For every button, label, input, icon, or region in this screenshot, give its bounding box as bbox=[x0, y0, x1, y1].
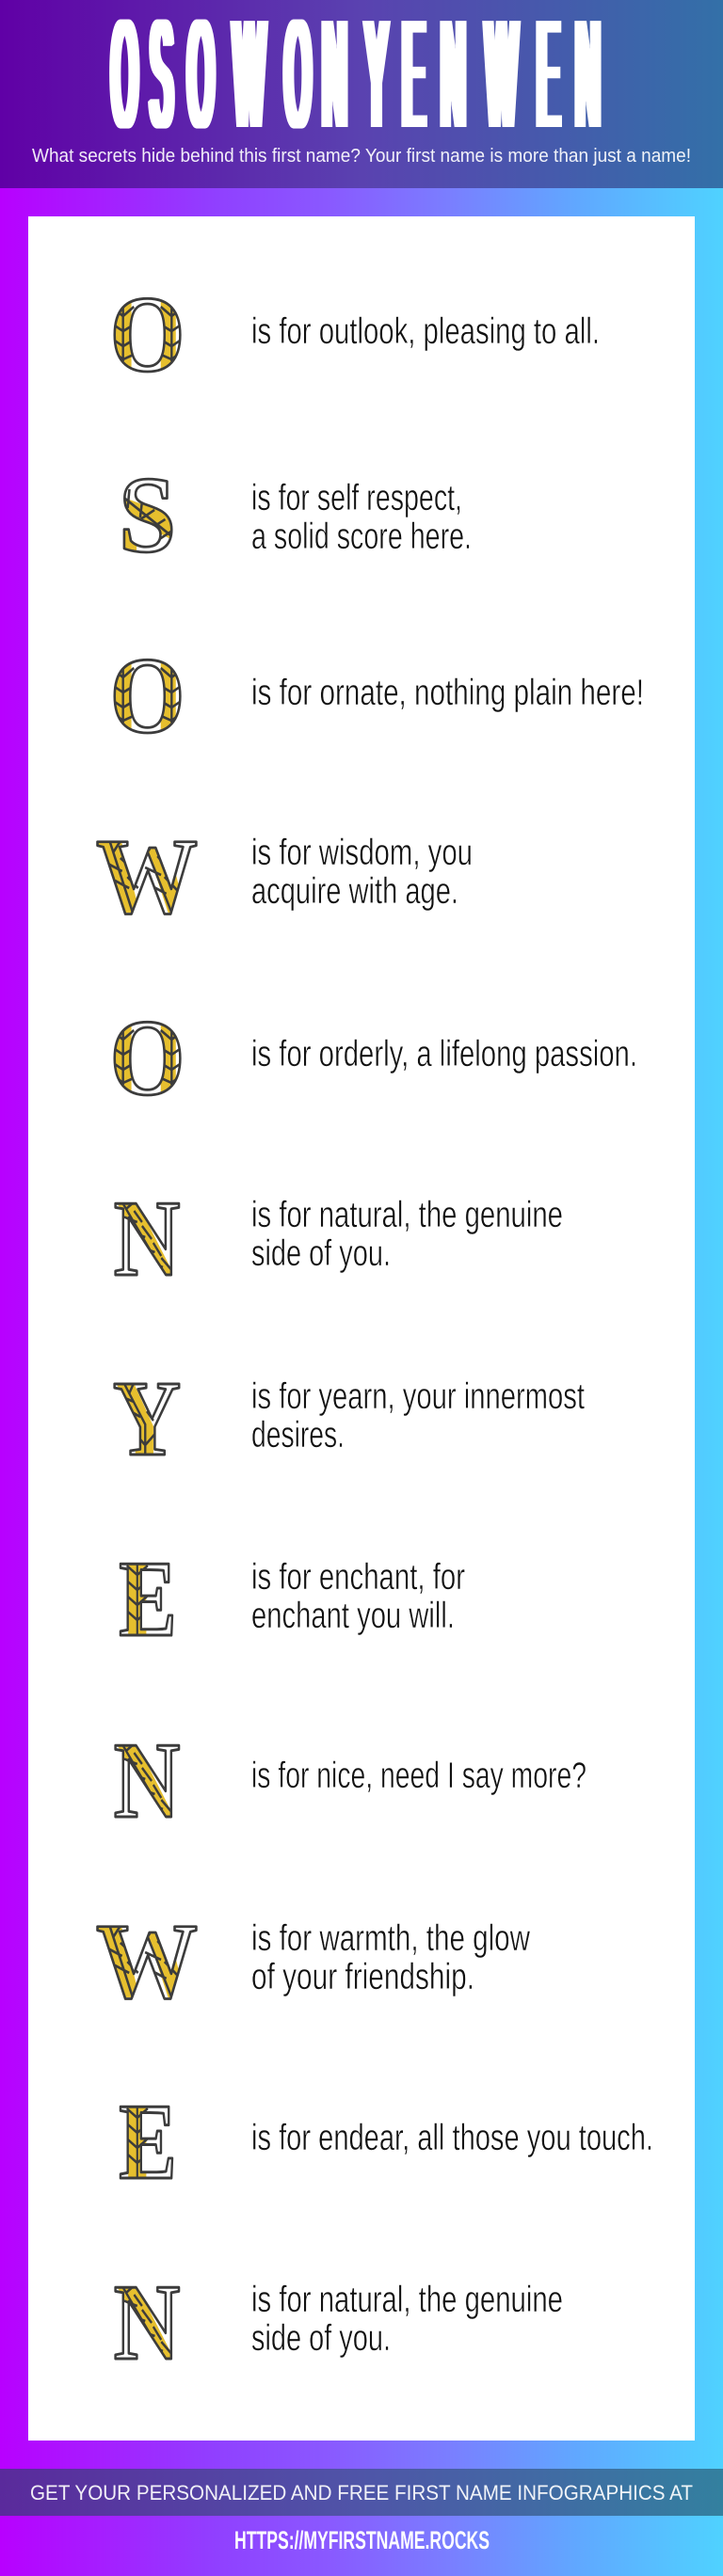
icon: letter N: N bbox=[114, 2264, 180, 2383]
icon: letter E: E bbox=[119, 2081, 177, 2202]
icon: letter N: N bbox=[114, 2264, 180, 2383]
text: W lines: of your friendship. bbox=[251, 1957, 474, 1997]
text: N lines bbox=[251, 2280, 563, 2359]
row 5: O bbox=[113, 1020, 635, 1097]
icon: letter N: N bbox=[114, 1722, 180, 1841]
row 12: N bbox=[114, 2284, 562, 2360]
icon: letter N: N bbox=[114, 1180, 180, 1299]
panel: letters list bbox=[28, 216, 695, 2441]
text: Y lines: desires. bbox=[251, 1415, 345, 1455]
text: W lines bbox=[251, 833, 473, 912]
text: Y lines bbox=[251, 1376, 585, 1455]
icon: letter E: E bbox=[119, 1538, 177, 1659]
icon: letter N: N bbox=[114, 1180, 180, 1299]
icon: letter O: O bbox=[110, 998, 185, 1118]
row 2: S bbox=[122, 478, 469, 553]
text: N lines: side of you. bbox=[251, 2318, 391, 2359]
icon: letter S: S bbox=[119, 455, 176, 576]
icon: letter N: N bbox=[114, 1722, 180, 1841]
icon: letter O bbox=[113, 297, 182, 373]
icon: letter N bbox=[114, 1744, 181, 1818]
icon: letter N bbox=[114, 1202, 181, 1276]
row 3: O bbox=[113, 659, 642, 734]
icon: letter W: W bbox=[96, 818, 198, 937]
text: S lines: a solid score here. bbox=[251, 517, 472, 557]
icon: letter S: S bbox=[119, 455, 176, 576]
header band bbox=[0, 0, 723, 188]
icon: letter O: O bbox=[110, 636, 185, 755]
icon: letter N bbox=[114, 2286, 181, 2360]
text: W lines: acquire with age. bbox=[251, 871, 458, 912]
row 6: N bbox=[114, 1201, 562, 1276]
icon: letter W bbox=[96, 840, 198, 915]
icon: letter W: W bbox=[96, 818, 198, 937]
row 8: E bbox=[119, 1562, 465, 1637]
text: O line: is for outlook, pleasing to all. bbox=[251, 311, 600, 352]
text: N lines: is for natural, the genuine bbox=[251, 2280, 563, 2320]
icon: letter Y: Y bbox=[113, 1360, 181, 1479]
icon: letter S bbox=[122, 478, 173, 553]
text: E lines bbox=[251, 1557, 465, 1636]
icon: letter O: O bbox=[110, 275, 185, 394]
text: Y lines: is for yearn, your innermost bbox=[251, 1376, 585, 1417]
icon: letter O: O bbox=[110, 998, 185, 1118]
text: W lines: is for wisdom, you bbox=[251, 833, 473, 873]
icon: letter O bbox=[113, 659, 182, 734]
row 11: E bbox=[119, 2106, 651, 2179]
icon: letter E bbox=[119, 1562, 173, 1637]
row 4: W bbox=[96, 837, 471, 915]
footer call to action: GET YOUR PERSONALIZED AND FREE FIRST NAME INFOGRAPHICS AT bbox=[30, 2481, 693, 2504]
row 10: W bbox=[96, 1923, 530, 2000]
footer url: HTTPS://MYFIRSTNAME.ROCKS bbox=[234, 2526, 490, 2554]
text: N line: is for nice, need I say more? bbox=[251, 1756, 586, 1796]
icon: letter Y bbox=[113, 1383, 181, 1456]
icon: letter O bbox=[113, 1020, 182, 1097]
text: E lines: is for enchant, for bbox=[251, 1557, 465, 1598]
subtitle: What secrets hide behind this first name? Your first name is more than just a name! bbox=[32, 146, 691, 167]
text: W lines: is for warmth, the glow bbox=[251, 1918, 531, 1959]
icon: letter E bbox=[119, 2106, 173, 2179]
row 1: O bbox=[113, 297, 597, 373]
icon: letter W: W bbox=[96, 1902, 198, 2022]
text: W lines bbox=[251, 1918, 531, 1997]
icon: letter E: E bbox=[119, 2081, 177, 2202]
text: E lines: enchant you will. bbox=[251, 1596, 455, 1636]
icon: letter W: W bbox=[96, 1902, 198, 2022]
icon: letter W bbox=[96, 1925, 198, 2000]
icon: letter O: O bbox=[110, 275, 185, 394]
icon: letter Y: Y bbox=[113, 1360, 181, 1479]
text: N lines bbox=[251, 1195, 563, 1274]
footer band bbox=[0, 2469, 723, 2516]
text: N lines: side of you. bbox=[251, 1233, 391, 1274]
text: S lines bbox=[251, 478, 472, 557]
row 9: N bbox=[114, 1744, 586, 1818]
text: S lines: is for self respect, bbox=[251, 478, 462, 518]
row 7: Y bbox=[113, 1381, 585, 1456]
icon: letter E: E bbox=[119, 1538, 177, 1659]
text: N lines: is for natural, the genuine bbox=[251, 1195, 563, 1235]
icon: letter O: O bbox=[110, 636, 185, 755]
